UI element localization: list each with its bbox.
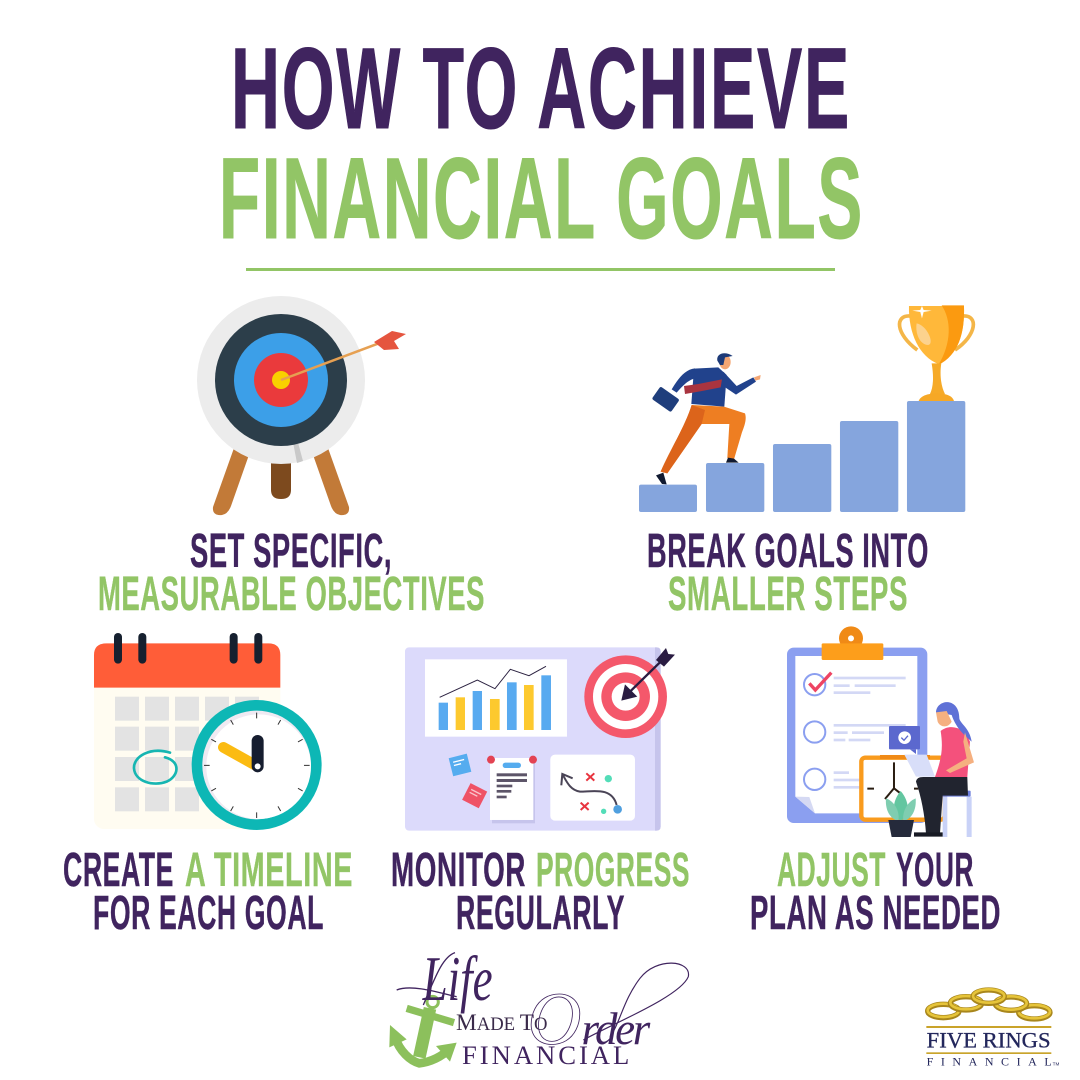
heading: set specific: MEASURABLE OBJECTIVES xyxy=(98,568,485,621)
heading: create a timeline: CREATE xyxy=(63,844,174,897)
icon: calendar and clock xyxy=(94,633,322,830)
heading: adjust your plan xyxy=(750,844,1001,940)
logo: Five Rings Financial xyxy=(926,989,1059,1068)
heading: adjust your plan: YOUR xyxy=(896,844,974,897)
logo: Five Rings Financial: FIVE RINGS xyxy=(927,1028,1051,1053)
anchor xyxy=(389,996,457,1063)
logo: Five Rings Financial: TM xyxy=(1053,1061,1059,1066)
heading: monitor progress: PROGRESS xyxy=(536,844,690,897)
heading: create a timeline: FOR EACH GOAL xyxy=(93,887,324,940)
runner xyxy=(652,353,761,484)
heading: break goals xyxy=(647,525,929,621)
logo: Life Made to Order Financial: Life xyxy=(422,944,493,1014)
heading: monitor progress: REGULARLY xyxy=(456,887,625,940)
logo: Life Made to Order Financial: FINANCIAL xyxy=(462,1040,629,1070)
logo: Life Made to Order Financial: Order xyxy=(527,978,651,1061)
logo: Life Made to Order Financial: MADETO xyxy=(456,1010,547,1036)
trophy xyxy=(900,305,973,401)
heading: monitor progress xyxy=(391,844,690,940)
bars xyxy=(639,401,965,512)
icon: steps and trophy xyxy=(639,305,973,512)
logo: Life Made to Order Financial xyxy=(389,944,689,1070)
icon: clipboard with woman xyxy=(787,626,974,837)
heading: set specific xyxy=(98,525,485,621)
heading: set specific: SET SPECIFIC, xyxy=(190,525,392,578)
heading: monitor progress: MONITOR xyxy=(391,844,526,897)
heading: break goals: SMALLER STEPS xyxy=(668,568,908,621)
heading: adjust your plan: ADJUST xyxy=(777,844,886,897)
title xyxy=(219,25,864,263)
logo: Five Rings Financial: FINANCIAL xyxy=(927,1054,1052,1068)
heading: create a timeline: A TIMELINE xyxy=(185,844,353,897)
icon: archery target xyxy=(197,296,406,515)
heading: create a timeline xyxy=(63,844,353,940)
icon: progress board xyxy=(405,647,675,831)
